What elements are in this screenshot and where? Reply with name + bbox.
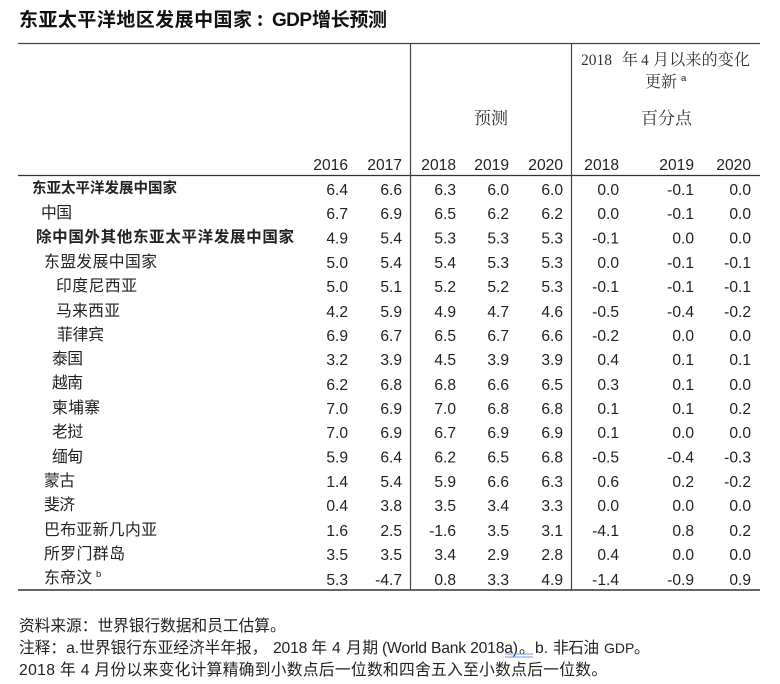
row: Cambodia: 7.0: [434, 401, 456, 418]
row: Indonesia: 5.0: [326, 279, 348, 296]
row: Malaysia: 4.9: [434, 304, 456, 321]
row: Myanmar: -0.3: [724, 450, 751, 466]
row: Fiji: 0.4: [326, 498, 348, 515]
row: Myanmar: 6.8: [541, 450, 563, 466]
row: Laos: [52, 419, 751, 442]
row: ASEAN: -0.1: [724, 255, 751, 272]
notes line: 。: [634, 640, 650, 657]
row: China: 0.0: [597, 206, 619, 223]
row: Solomon Islands: 3.4: [434, 547, 456, 564]
row: Mongolia: 1.4: [326, 474, 348, 491]
row: Mongolia: [44, 468, 751, 491]
header: year labels: 2020: [528, 157, 563, 174]
row: Laos: 0.0: [729, 425, 751, 442]
row: Myanmar: [52, 444, 751, 467]
notes line: 非石油: [553, 639, 599, 657]
header: year labels: 2019: [474, 157, 509, 174]
row: Malaysia: -0.4: [667, 304, 694, 321]
row: Fiji: 0.0: [672, 498, 694, 515]
row: Cambodia: 6.9: [380, 401, 402, 418]
row: Myanmar: 6.2: [434, 450, 456, 466]
row: Fiji: 3.8: [380, 498, 402, 515]
row: Papua New Guinea: -1.6: [429, 523, 456, 540]
row: Indonesia: -0.1: [667, 279, 694, 296]
row: Solomon Islands: 3.5: [326, 547, 348, 564]
row: China: 6.7: [326, 206, 348, 223]
row: Solomon Islands: 0.0: [729, 547, 751, 564]
row: Timor-Leste: -4.7: [375, 572, 402, 589]
row: Cambodia: 6.8: [541, 401, 563, 418]
row: Philippines: 0.0: [729, 328, 751, 345]
row: excluding China: 5.4: [380, 230, 402, 248]
row: Papua New Guinea: 2.5: [380, 523, 402, 540]
row: Indonesia: -0.1: [724, 279, 751, 296]
row: Cambodia: 0.2: [729, 401, 751, 418]
row: Cambodia: 6.8: [487, 401, 509, 418]
row: Papua New Guinea: 0.2: [729, 523, 751, 540]
row: excluding China: 0.0: [672, 230, 694, 248]
row: Timor-Leste: -1.4: [592, 572, 619, 589]
row: excluding China: 0.0: [729, 230, 751, 248]
row: China: -0.1: [667, 206, 694, 223]
row: Laos: 0.0: [672, 425, 694, 442]
row: Philippines: -0.2: [592, 328, 619, 345]
row: ASEAN: -0.1: [667, 255, 694, 272]
header: year labels: 2018: [421, 157, 456, 174]
header: change since April 2018: [581, 50, 750, 91]
row: ASEAN: 5.3: [541, 255, 563, 272]
title: [19, 5, 387, 32]
row: Vietnam: 0.0: [729, 377, 751, 394]
row: Myanmar: 6.4: [380, 450, 402, 466]
row: Philippines: 6.7: [487, 328, 509, 345]
row: Vietnam: 0.1: [672, 377, 694, 394]
row: Timor-Leste: b: [96, 569, 101, 580]
row: Laos: 6.7: [434, 425, 456, 442]
row: Fiji: 3.3: [541, 498, 563, 515]
title: :: [257, 5, 263, 32]
row: China: 中国: [41, 200, 72, 223]
row: East Asia Pacific developing: 6.4: [326, 182, 348, 199]
row: Indonesia: 5.1: [380, 279, 402, 296]
row: Malaysia: 4.6: [541, 304, 563, 321]
notes line: GDP: [604, 640, 634, 656]
row: Timor-Leste: 0.9: [729, 572, 751, 589]
row: Timor-Leste: 3.3: [487, 572, 509, 589]
row: Papua New Guinea: -4.1: [592, 523, 619, 540]
header: year labels: 2017: [367, 157, 402, 174]
notes line: 。: [519, 640, 535, 657]
header: year labels: 2018: [584, 157, 619, 174]
row: Myanmar: 缅甸: [52, 444, 83, 467]
row: ASEAN: 5.4: [380, 255, 402, 272]
row: ASEAN: 东盟发展中国家: [44, 249, 157, 272]
row: Vietnam: 6.8: [380, 377, 402, 394]
row: Philippines: 0.0: [672, 328, 694, 345]
row: ASEAN: 0.0: [597, 255, 619, 272]
row: Papua New Guinea: 1.6: [326, 523, 348, 540]
row: Philippines: 6.5: [434, 328, 456, 345]
header: percentage points: 百分点: [641, 109, 693, 128]
row: ASEAN: 5.4: [434, 255, 456, 272]
row: Thailand: 4.5: [434, 352, 456, 369]
row: Thailand: 0.4: [597, 352, 619, 369]
row: ASEAN: 5.0: [326, 255, 348, 272]
notes line: b.: [535, 640, 548, 657]
row: Papua New Guinea: 3.5: [487, 523, 509, 540]
row: Thailand: 0.1: [729, 352, 751, 369]
row: Papua New Guinea: 3.1: [541, 523, 563, 540]
row: excluding China: [36, 225, 751, 248]
row: Malaysia: 马来西亚: [56, 298, 120, 321]
row: Cambodia: [52, 395, 751, 418]
row: Philippines: [57, 322, 751, 345]
header: year labels: [313, 157, 751, 174]
row: Solomon Islands: 0.4: [597, 547, 619, 564]
header: forecast: 预测: [474, 109, 508, 128]
row: ASEAN: [44, 249, 751, 272]
row: Thailand: 3.9: [487, 352, 509, 369]
row: Indonesia: -0.1: [592, 279, 619, 296]
row: Philippines: 6.6: [541, 328, 563, 345]
row: Indonesia: 5.2: [434, 279, 456, 296]
row: Vietnam: 0.3: [597, 377, 619, 394]
row: East Asia Pacific developing: 6.3: [434, 182, 456, 199]
row: East Asia Pacific developing: [32, 177, 751, 199]
row: East Asia Pacific developing: -0.1: [667, 182, 694, 199]
row: excluding China: 除中国外其他东亚太平洋发展中国家: [36, 225, 294, 247]
row: China: 0.0: [729, 206, 751, 223]
header: year labels: 2020: [716, 157, 751, 174]
row: Mongolia: 6.3: [541, 474, 563, 491]
row: East Asia Pacific developing: 6.6: [380, 182, 402, 199]
row: Mongolia: 蒙古: [44, 468, 75, 491]
header: year labels: 2019: [659, 157, 694, 174]
row: Cambodia: 柬埔寨: [52, 395, 100, 418]
row: Mongolia: 6.6: [487, 474, 509, 491]
row: Solomon Islands: 2.8: [541, 547, 563, 564]
row: Myanmar: -0.4: [667, 450, 694, 466]
row: excluding China: 4.9: [326, 230, 348, 248]
row: Indonesia: 5.3: [541, 279, 563, 296]
title: 东亚太平洋地区发展中国家: [19, 5, 252, 32]
notes line: [19, 635, 650, 658]
row: Solomon Islands: 所罗门群岛: [44, 541, 125, 564]
notes line: (World Bank 2018a): [382, 640, 518, 657]
row: Papua New Guinea: [44, 517, 751, 540]
row: East Asia Pacific developing: 0.0: [729, 182, 751, 199]
row: Fiji: 3.4: [487, 498, 509, 515]
row: Vietnam: 6.8: [434, 377, 456, 394]
row: Laos: 6.9: [541, 425, 563, 442]
row: Mongolia: 0.2: [672, 474, 694, 491]
row: Indonesia: [56, 273, 751, 296]
row: Timor-Leste: [44, 565, 751, 589]
row: Thailand: 3.9: [380, 352, 402, 369]
row: Solomon Islands: [44, 541, 751, 564]
row: Indonesia: 印度尼西亚: [56, 273, 137, 296]
row: Thailand: 0.1: [672, 352, 694, 369]
title: 增长预测: [312, 5, 387, 32]
row: Mongolia: 0.6: [597, 474, 619, 491]
row: Timor-Leste: 东帝汶: [44, 565, 92, 588]
row: Fiji: [44, 492, 751, 515]
row: excluding China: -0.1: [592, 230, 619, 248]
row: Thailand: 3.2: [326, 352, 348, 369]
row: Solomon Islands: 3.5: [380, 547, 402, 564]
row: Mongolia: -0.2: [724, 474, 751, 491]
header: year labels: 2016: [313, 157, 348, 174]
row: Timor-Leste: 4.9: [541, 572, 563, 589]
row: Malaysia: [56, 298, 751, 321]
row: Malaysia: 4.2: [326, 304, 348, 321]
row: Fiji: 0.0: [597, 498, 619, 515]
notes line: 4 月期: [332, 639, 378, 657]
row: China: [41, 200, 751, 223]
row: Fiji: 0.0: [729, 498, 751, 515]
row: China: 6.5: [434, 206, 456, 223]
row: ASEAN: 5.3: [487, 255, 509, 272]
row: East Asia Pacific developing: 0.0: [597, 182, 619, 199]
row: China: 6.2: [541, 206, 563, 223]
row: Myanmar: 5.9: [326, 450, 348, 466]
row: excluding China: 5.3: [487, 230, 509, 248]
row: Solomon Islands: 2.9: [487, 547, 509, 564]
notes line: 2018 年: [273, 639, 327, 657]
row: Myanmar: -0.5: [592, 450, 619, 466]
row: Laos: 老挝: [52, 419, 83, 442]
row: East Asia Pacific developing: 6.0: [487, 182, 509, 199]
row: Malaysia: 5.9: [380, 304, 402, 321]
row: Vietnam: 6.6: [487, 377, 509, 394]
row: Vietnam: 6.2: [326, 377, 348, 394]
row: Thailand: 3.9: [541, 352, 563, 369]
rounding note: 2018 年 4 月份以来变化计算精确到小数点后一位数和四舍五入至小数点后一位数。: [19, 660, 607, 679]
row: Thailand: 泰国: [52, 346, 83, 369]
row: Vietnam: 6.5: [541, 377, 563, 394]
row: Malaysia: -0.5: [592, 304, 619, 321]
row: Philippines: 6.7: [380, 328, 402, 345]
row: Malaysia: -0.2: [724, 304, 751, 321]
row: Thailand: [52, 346, 751, 369]
row: Cambodia: 7.0: [326, 401, 348, 418]
row: Mongolia: 5.4: [380, 474, 402, 491]
row: Laos: 0.1: [597, 425, 619, 442]
row: Laos: 6.9: [487, 425, 509, 442]
header: change since April 2018: 年: [622, 50, 638, 69]
title: GDP: [272, 10, 312, 31]
row: Indonesia: 5.2: [487, 279, 509, 296]
row: Fiji: 斐济: [44, 492, 75, 515]
row: China: 6.9: [380, 206, 402, 223]
row: Papua New Guinea: 巴布亚新几内亚: [44, 517, 157, 540]
row: excluding China: 5.3: [434, 230, 456, 248]
row: Mongolia: 5.9: [434, 474, 456, 491]
row: Laos: 6.9: [380, 425, 402, 442]
row: China: 6.2: [487, 206, 509, 223]
notes line: 注释：a.世界银行东亚经济半年报，: [19, 635, 267, 658]
row: Timor-Leste: 0.8: [434, 572, 456, 589]
header: change since April 2018: 月以来的变化: [653, 51, 750, 69]
row: Papua New Guinea: 0.8: [672, 523, 694, 540]
row: East Asia Pacific developing: 东亚太平洋发展中国家: [32, 177, 178, 198]
row: Philippines: 菲律宾: [57, 322, 104, 345]
header: change since April 2018: 4: [641, 52, 649, 69]
row: Fiji: 3.5: [434, 498, 456, 515]
row: Malaysia: 4.7: [487, 304, 509, 321]
row: Laos: 7.0: [326, 425, 348, 442]
source note: 资料来源：世界银行数据和员工估算。: [19, 613, 286, 636]
row: Solomon Islands: 0.0: [672, 547, 694, 564]
row: Cambodia: 0.1: [672, 401, 694, 418]
header: change since April 2018: 2018: [581, 52, 612, 69]
row: Vietnam: 越南: [52, 370, 83, 393]
row: Myanmar: 6.5: [487, 450, 509, 466]
header: change since April 2018: a: [681, 73, 687, 84]
row: Philippines: 6.9: [326, 328, 348, 345]
header: change since April 2018: 更新: [645, 73, 677, 91]
row: excluding China: 5.3: [541, 230, 563, 248]
row: East Asia Pacific developing: 6.0: [541, 182, 563, 199]
row: Timor-Leste: 5.3: [326, 572, 348, 589]
row: Timor-Leste: -0.9: [667, 572, 694, 589]
row: Vietnam: [52, 370, 751, 394]
row: Cambodia: 0.1: [597, 401, 619, 418]
